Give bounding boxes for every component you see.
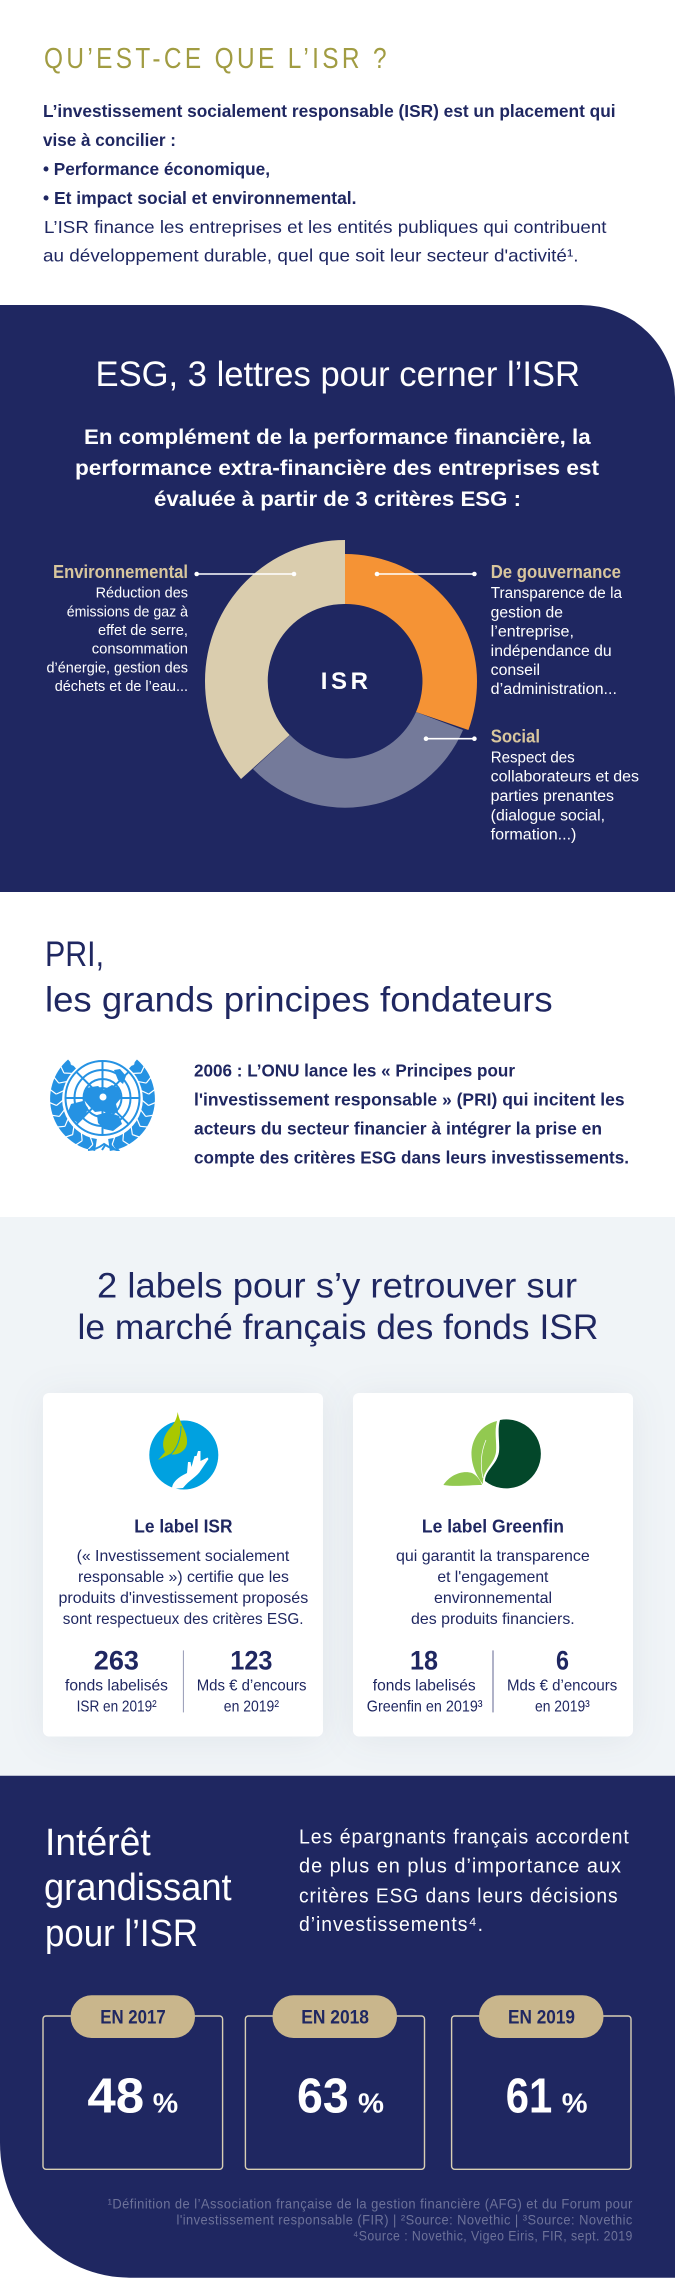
card: label Greenfin	[353, 1393, 633, 1736]
text block: governance: indépendance du	[491, 643, 612, 660]
text block: environmental	[46, 562, 189, 695]
stat box: 2019: EN 2019	[508, 2007, 575, 2028]
stat: 263 funds: fonds labelisés	[65, 1678, 168, 1695]
connector: governance	[375, 572, 477, 576]
text block: savers: Les épargnants français accordent	[299, 1825, 630, 1848]
title: qu'est-ce que l'ISR: QU’EST-CE QUE L’ISR ?	[44, 43, 390, 75]
text block: social: formation...)	[491, 827, 576, 844]
icon: label ISR	[149, 1412, 218, 1490]
heading: PRI: PRI,	[45, 935, 104, 974]
text block: PRI description	[194, 1061, 629, 1167]
heading: labels: 2 labels pour s’y retrouver sur	[97, 1266, 577, 1306]
stat: 123 billion: 123	[230, 1645, 272, 1675]
text block: social: Social	[491, 727, 540, 747]
stat: 18 funds	[367, 1645, 483, 1715]
icon: label Greenfin	[443, 1419, 541, 1488]
text block: ISR definition: • Et impact social et environnemental.	[43, 188, 356, 208]
panel: ESG criteria	[0, 305, 675, 892]
text block: ESG intro	[75, 426, 599, 511]
footnotes: ¹Définition de l’Association française de la gestion financière (AFG) et du Forum pour	[108, 2195, 633, 2211]
text block: environmental: effet de serre,	[98, 622, 188, 639]
heading: growing interest: Intérêt	[45, 1822, 151, 1864]
text block: governance: De gouvernance	[491, 562, 621, 582]
stat box: 2017: EN 2017	[100, 2007, 166, 2028]
text block: governance: l’entreprise,	[491, 624, 574, 641]
text block: environmental: consommation	[92, 641, 188, 658]
text block: label ISR description: sont respectueux des critères ESG.	[63, 1611, 303, 1628]
heading: growing interest	[44, 1822, 232, 1955]
panel: growing interest	[0, 1776, 675, 2278]
stat box: 2017: 48	[87, 2070, 144, 2124]
stat box: 2018: EN 2018	[301, 2007, 369, 2028]
text block: label ISR description: produits d'investissement proposés	[58, 1590, 308, 1607]
stat box: 2017	[43, 1995, 223, 2169]
stat: 123 billion: Mds € d’encours	[197, 1678, 306, 1695]
stat: 6 billion: Mds € d’encours	[507, 1678, 617, 1695]
text block: PRI description: l'investissement responsable » (PRI) qui incitent les	[194, 1090, 625, 1110]
text block: social: collaborateurs et des	[491, 769, 639, 786]
heading: PRI: les grands principes fondateurs	[45, 981, 553, 1020]
heading: ESG: ESG, 3 lettres pour cerner l’ISR	[96, 355, 580, 394]
text block: social: parties prenantes	[491, 788, 614, 805]
stat box: 2019	[452, 1995, 631, 2169]
heading: growing interest: pour l’ISR	[45, 1913, 198, 1955]
text block: governance: conseil	[491, 662, 540, 679]
heading: labels	[78, 1266, 598, 1347]
text block: ISR definition: L’ISR finance les entreprises et les entités publiques qui contribuent	[44, 217, 607, 237]
stat box: 2017: %	[153, 2088, 178, 2119]
text block: label Greenfin description: environnemental	[434, 1590, 552, 1607]
donut chart: ESG criteria	[205, 540, 477, 808]
text block: ISR definition: L’investissement socialement responsable (ISR) est un placement qui	[43, 101, 616, 121]
text block: PRI description: 2006 : L’ONU lance les « Principes pour	[194, 1061, 515, 1081]
heading: growing interest: grandissant	[44, 1867, 232, 1909]
text block: social	[491, 727, 639, 844]
donut chart: ESG criteria: ISR	[321, 668, 368, 695]
heading: PRI	[45, 935, 553, 1020]
stat: 263 funds: ISR en 2019²	[77, 1698, 157, 1715]
text block: label Greenfin description: qui garantit la transparence	[396, 1548, 590, 1565]
icon: UN emblem	[48, 1056, 157, 1152]
text block: label Greenfin description: des produits financiers.	[411, 1611, 575, 1628]
heading: le label Greenfin: Le label Greenfin	[422, 1516, 564, 1537]
text block: savers: de plus en plus d’importance aux	[299, 1855, 622, 1878]
stat: 123 billion: en 2019²	[224, 1698, 280, 1715]
text block: label Greenfin description: et l'engagement	[437, 1569, 549, 1586]
stat: 18 funds: Greenfin en 2019³	[367, 1698, 483, 1715]
connector: social	[424, 736, 477, 741]
stat: 6 billion: en 2019³	[535, 1698, 590, 1715]
text block: savers: critères ESG dans leurs décisions	[299, 1884, 619, 1907]
stat box: 2018	[245, 1995, 424, 2169]
connector: environmental	[194, 572, 296, 576]
text block: savers	[299, 1825, 630, 1936]
text block: environmental: Réduction des	[96, 585, 188, 602]
stat: 6 billion: 6	[556, 1645, 569, 1675]
heading: labels: le marché français des fonds ISR	[78, 1308, 598, 1347]
text block: savers: d’investissements⁴.	[299, 1913, 484, 1936]
text block: ISR definition: vise à concilier :	[43, 130, 176, 150]
stat box: 2018: 63	[297, 2070, 349, 2124]
footnotes: ⁴Source : Novethic, Vigeo Eiris, FIR, sept. 2019	[353, 2227, 633, 2243]
stat: 18 funds: 18	[410, 1645, 438, 1675]
text block: label ISR description: responsable ») certifie que les	[78, 1569, 289, 1586]
text block: environmental: déchets et de l’eau...	[55, 678, 188, 695]
stat: 123 billion	[197, 1645, 306, 1715]
text block: ISR definition: au développement durable, quel que soit leur secteur d'activité¹.	[43, 246, 578, 266]
text block: social: (dialogue social,	[491, 807, 605, 824]
text block: governance: d’administration...	[491, 681, 617, 698]
text block: ESG intro: évaluée à partir de 3 critères ESG :	[154, 488, 521, 511]
text block: social: Respect des	[491, 749, 575, 766]
text block: ISR definition: • Performance économique,	[43, 159, 270, 179]
stat: 18 funds: fonds labelisés	[373, 1678, 476, 1695]
card: label ISR	[43, 1393, 323, 1736]
text block: environmental: Environnemental	[53, 562, 188, 582]
stat box: 2019: %	[562, 2088, 588, 2119]
stat box: 2019: 61	[506, 2070, 552, 2124]
text block: PRI description: acteurs du secteur financier à intégrer la prise en	[194, 1118, 602, 1138]
text block: ISR definition	[43, 101, 616, 266]
stat: 263 funds: 263	[94, 1645, 139, 1675]
text block: label Greenfin description	[396, 1548, 590, 1628]
heading: le label ISR: Le label ISR	[134, 1516, 232, 1537]
text block: PRI description: compte des critères ESG dans leurs investissements.	[194, 1147, 629, 1167]
footnotes: l'investissement responsable (FIR) | ²Source: Novethic | ³Source: Novethic	[176, 2211, 633, 2227]
panel: labels	[0, 1217, 675, 1776]
text block: governance: gestion de	[491, 604, 563, 621]
text block: environmental: émissions de gaz à	[67, 603, 189, 620]
stat: 6 billion	[507, 1645, 617, 1715]
text block: label ISR description	[58, 1548, 308, 1628]
footnotes	[108, 2195, 633, 2243]
text block: label ISR description: (« Investissement socialement	[77, 1548, 290, 1565]
text block: ESG intro: performance extra-financière des entreprises est	[75, 457, 599, 480]
text block: environmental: d’énergie, gestion des	[46, 659, 188, 676]
stat box: 2018: %	[358, 2088, 384, 2119]
text block: governance: Transparence de la	[491, 585, 622, 602]
text block: ESG intro: En complément de la performance financière, la	[84, 426, 591, 449]
text block: governance	[491, 562, 622, 698]
stat: 263 funds	[65, 1645, 168, 1715]
